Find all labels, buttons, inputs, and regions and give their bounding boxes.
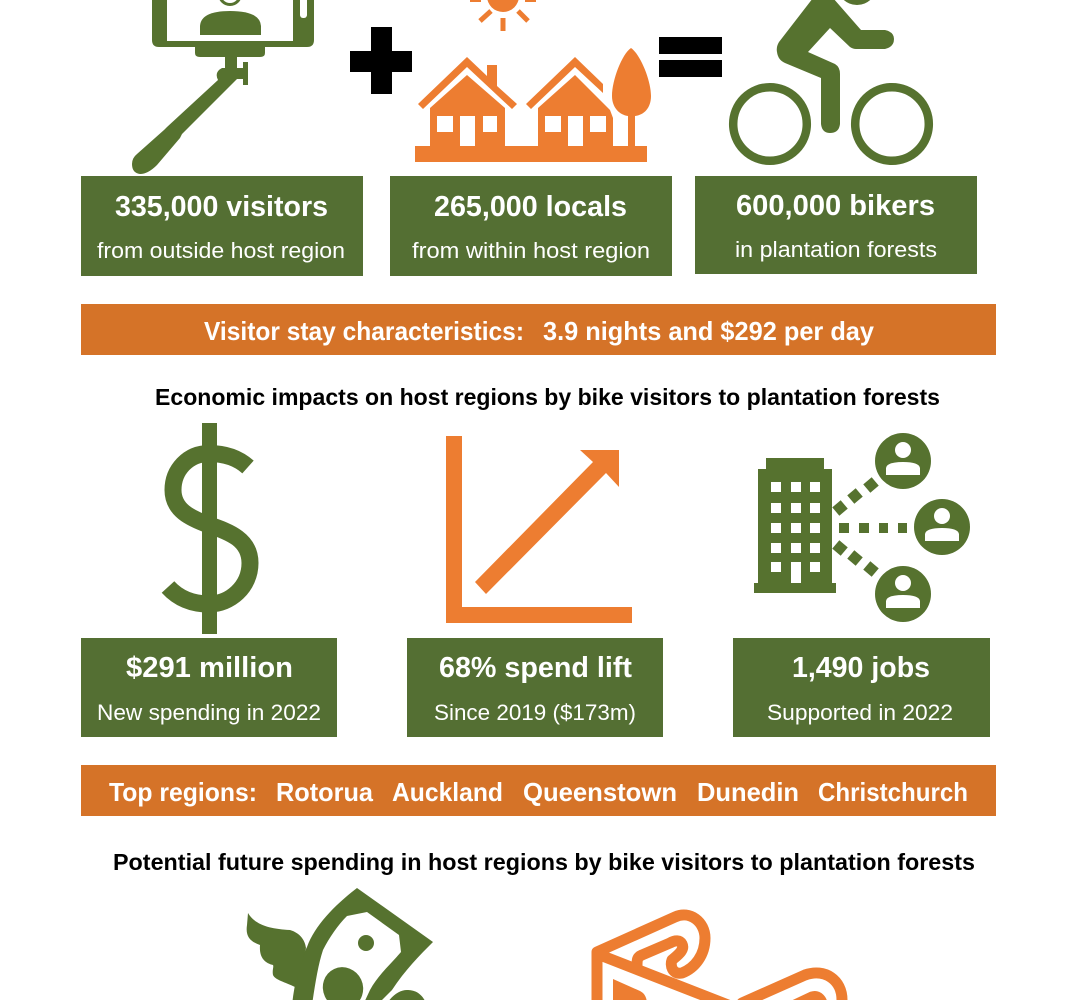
icon: dollar sign — [168, 423, 250, 634]
banner: top regions: Dunedin — [697, 777, 799, 807]
banner: top regions: Top regions: — [109, 777, 257, 807]
banner: visitor stay characteristics: Visitor stay characteristics: — [204, 316, 524, 346]
icon: money with wings — [247, 888, 433, 1000]
banner: top regions: Auckland — [392, 777, 503, 807]
icon: sun — [470, 0, 536, 31]
stat: bikers: in plantation forests — [735, 237, 937, 262]
banner: top regions: Christchurch — [818, 777, 968, 807]
stat: jobs — [733, 638, 990, 737]
stat: new spending: New spending in 2022 — [97, 700, 321, 725]
stat: locals: from within host region — [412, 238, 650, 263]
icon: plus sign — [350, 27, 412, 94]
stat: visitors: 335,000 visitors — [115, 191, 328, 223]
icon: houses and tree — [415, 48, 651, 162]
stat: spend lift: 68% spend lift — [439, 652, 632, 684]
icon: selfie stick with phone — [132, 0, 314, 174]
stat: spend lift: Since 2019 ($173m) — [434, 700, 636, 725]
stat: locals: 265,000 locals — [434, 191, 627, 223]
icon: orange scroll map — [597, 915, 842, 1000]
stat: jobs: 1,490 jobs — [792, 652, 930, 684]
stat: jobs: Supported in 2022 — [767, 700, 953, 725]
banner: top regions: Rotorua — [276, 777, 374, 807]
stat: visitors: from outside host region — [97, 238, 345, 263]
stat: spend lift — [407, 638, 663, 737]
icon: equals sign — [659, 37, 722, 77]
stat: bikers — [695, 176, 977, 274]
stat: locals — [390, 176, 672, 276]
banner: visitor stay characteristics: 3.9 nights and $292 per day — [543, 316, 875, 346]
stat: bikers: 600,000 bikers — [736, 190, 935, 222]
banner: top regions: Queenstown — [523, 777, 677, 807]
heading: economic impacts: Economic impacts on host regions by bike visitors to plantation forests — [155, 384, 940, 410]
banner: top regions — [81, 765, 996, 816]
stat: visitors — [81, 176, 363, 276]
stat: new spending: $291 million — [126, 652, 293, 684]
banner: visitor stay characteristics — [81, 304, 996, 355]
icon: cyclist — [733, 0, 929, 161]
icon: growth chart arrow — [446, 436, 632, 623]
icon: building connected to people — [754, 433, 970, 622]
stat: new spending — [81, 638, 337, 737]
heading: potential future spending: Potential future spending in host regions by bike visitors to plantation forests — [113, 849, 975, 875]
